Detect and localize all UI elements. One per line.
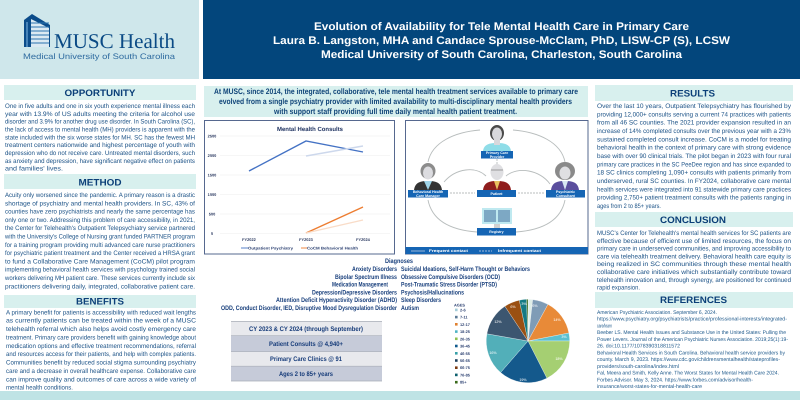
label: behavioral health care manager: Behavioral Health (413, 190, 443, 194)
y axis labels: 500 (209, 212, 215, 216)
diagnoses right column: Post-Traumatic Stress Disorder (PTSD) (401, 282, 497, 289)
panel: conclusion (595, 212, 793, 292)
contact key bar (406, 247, 588, 254)
conclusion text: care via telehealth treatment delivery. Behavioral health care equity is (597, 253, 791, 260)
results text: Over the last 10 years, Outpatient Telepsychiatry has flourished by (597, 103, 792, 110)
method text: for a training program providing multi advanced care nurse practitioners (5, 242, 195, 249)
pie legend: ages: 36-45 (460, 344, 471, 348)
summary table: CY 2023 & CY 2024 (through September) (249, 326, 363, 333)
pie percentage labels (489, 302, 567, 382)
diagnoses right column (401, 266, 530, 312)
conclusion text: primary care in underserved communities, and improving accessibility to (597, 246, 791, 253)
summary table: Patient Consults @ 4,940+ (269, 341, 343, 348)
results text: providing 12,000+ consults serving a current 74 practices with patients (597, 111, 791, 118)
intro callout (204, 86, 588, 117)
label: behavioral health care manager (408, 190, 448, 198)
pie legend: ages: 7-11 (460, 315, 468, 320)
pie legend: ages: 18-25 (460, 329, 471, 334)
y axis labels: 2500 (208, 134, 216, 138)
benefits text: mental health conditions. (6, 385, 73, 392)
method text: the Center for Telehealth's Outpatient Telepsychiatry service partnered (5, 225, 195, 232)
summary table: Primary Care Clinics @ 91 (270, 356, 342, 363)
results text: sustained completed consult increase. CoCM is a model for treating (597, 136, 791, 143)
conclusion text: MUSC's Center for Telehealth's mental health services for SC patients are (597, 230, 791, 237)
method text: to fund a Collaborative Care Management (CoCM) pilot program (5, 258, 195, 265)
pie percentage labels: 6% (532, 304, 538, 308)
chart legend (241, 246, 359, 250)
label: patient (477, 190, 516, 197)
conclusion text: telehealth innovation and, through synergy, are positioned for continued (597, 277, 791, 284)
label: registry (477, 228, 516, 236)
opportunity text: One in five adults and one in six youth experience mental illness each (5, 103, 195, 110)
opportunity text: and families' lives. (5, 166, 63, 173)
references list: care/learn (597, 324, 612, 330)
conclusion text (597, 230, 791, 292)
pie legend: ages (454, 302, 471, 385)
panel: opportunity (4, 85, 196, 173)
diagnoses left column: Depression/Depressive Disorders (312, 289, 397, 296)
opportunity text: depression who do not receive care. Untreated mental disorders, such (5, 150, 195, 157)
references list: Beeber LS. Mental Health Issues and Substance Use in the United States: Pulling the (597, 330, 786, 336)
opportunity text: year with 13.9% of US adults meeting the criteria for alcohol use (5, 111, 195, 118)
icon: MUSC hospital building (24, 14, 50, 47)
label: primary care provider (481, 151, 513, 159)
arrows between care team (428, 130, 565, 232)
diagnoses left column: ODD, Conduct Disorder, IED, Disruptive Mood Dysregulation Disorder (221, 305, 397, 312)
chart legend: Outpatient Psychiatry (248, 246, 294, 250)
line chart: mental health consults (204, 120, 394, 254)
heading: method: METHOD (78, 176, 122, 188)
references list: county. March 9, 2023. https://www.cdc.gov/childrensmentalhealth/stateprofiles- (597, 357, 780, 363)
diagnoses left column (221, 266, 397, 312)
pie legend: ages: 2-6 (460, 307, 466, 312)
logo wordmark: MUSC Health (54, 29, 176, 53)
pie percentage labels: 16% (489, 351, 497, 355)
references list: Power Levers. Journal of the American Psychiatric Nurses Association. 2019;25(1):19- (597, 337, 788, 343)
series: CoCM behavioral health (306, 207, 363, 233)
pie legend: ages: 85+ (460, 380, 467, 385)
diagnoses heading: Diagnoses (385, 258, 413, 265)
heading: references: REFERENCES (660, 294, 727, 305)
label: psychiatric consultant (546, 190, 585, 198)
pie percentage labels: 12% (494, 320, 502, 324)
opportunity text: the lack of access to mental health (MH) providers is apparent with the (5, 126, 195, 134)
heading: conclusion: CONCLUSION (660, 214, 726, 225)
benefits text: medication options and effective treatment recommendations, referral (6, 343, 196, 350)
heading: opportunity: OPPORTUNITY (64, 87, 136, 98)
method text: implementing behavioral health services with psychology trained social (5, 267, 195, 274)
icon: primary care provider (483, 125, 511, 151)
intro callout: At MUSC, since 2014, the integrated, collaborative, tele mental health treatment services available to primary care (214, 87, 578, 96)
label: behavioral health care manager: Care Manager (416, 194, 440, 198)
benefits text: telehealth referral which also helps avoid costly emergency care (6, 326, 196, 333)
pie legend: ages: 66-75 (460, 365, 471, 370)
collaborative care diagram (406, 120, 588, 254)
diagnoses right column: Autism (401, 305, 419, 312)
method text: practitioners delivering daily, integrated, collaborative patient care. (5, 283, 195, 290)
contact key bar: Infrequent contact (498, 248, 542, 253)
poster title: Evolution of Availability for Tele Mental Health Care in Primary Care (314, 21, 689, 33)
label: registry: Registry (489, 230, 504, 234)
references list: Behavioral Health Services in South Carolina. Behavioral health service providers by (597, 350, 785, 356)
chart legend: CoCM Behavioral Health (307, 246, 359, 250)
panel: benefits (4, 295, 197, 392)
benefits text (6, 309, 197, 392)
opportunity text (5, 103, 195, 173)
y axis labels: 1500 (208, 172, 216, 178)
method text (4, 192, 196, 290)
benefits text: A primary benefit for patients is accessibility with reduced wait lengths (6, 309, 196, 316)
pie legend: ages: 56-65 (460, 358, 471, 363)
diagnoses right column: Sleep Disorders (401, 297, 441, 304)
diagnoses right column: Obsessive Compulsive Disorders (OCD) (401, 274, 500, 281)
conclusion text: effective because of efficient use of limited resources, the focus on (597, 238, 791, 245)
pie percentage labels: 3% (561, 335, 567, 339)
label: psychiatric consultant: Psychiatric (556, 190, 575, 194)
diagnoses right column: Suicidal Ideations, Self-Harm Thought or Behaviors (401, 266, 530, 273)
y axis labels: 0 (211, 231, 213, 236)
results text: behavioral health in the context of primary care with strong evidence (597, 145, 791, 152)
benefits text: care and a decrease in overall healthcare expense. Collaborative care (6, 368, 196, 375)
diagnoses left column: Bipolar Spectrum Illness (335, 274, 397, 281)
title banner (203, 0, 800, 79)
diagnoses left column: Attention Deficit Hyperactivity Disorder (ADHD) (276, 297, 397, 304)
panel: method (4, 174, 196, 290)
pie legend: ages: 76-85 (460, 372, 471, 377)
results text: health services were integrated into 91 statewide primary care practices (597, 186, 791, 193)
pie percentage labels: 6% (510, 305, 516, 309)
method text: workers delivering MH patient care. These services currently include six (4, 275, 196, 282)
results text (597, 103, 792, 210)
intro callout: with support staff providing full time daily mental health patient treatment. (273, 107, 517, 116)
series: CoCM behavioral health faded (306, 220, 363, 233)
x axis labels: FY2022 (242, 237, 257, 242)
y axis labels: 2000 (208, 153, 216, 158)
pie chart: ages (486, 299, 570, 383)
benefits text: and resources access for their patients, and help with complex patients. (6, 351, 196, 358)
opportunity text: state included with the six worse states for MH. SC has the fewest MH (5, 134, 195, 141)
label: primary care provider: Provider (490, 155, 505, 159)
x axis labels: FY2024 (356, 237, 371, 242)
contact key bar: Frequent contact (429, 248, 469, 253)
references list: Forbes Advisor. May 3, 2024. https://www.forbes.com/advisor/health- (597, 377, 753, 383)
benefits text: can improve quality and outcomes of care across a wide variety of (6, 376, 196, 383)
results text: ages from 2 to 85+ years. (597, 203, 661, 210)
references list: providers/south-carolina/index.html (597, 364, 679, 370)
y axis labels: 1000 (208, 192, 216, 197)
pie legend: ages: 12-17 (460, 322, 470, 327)
method text: for psychiatric patient treatment and the Center received a HRSA grant (5, 250, 195, 257)
label: primary care provider: Primary Care (486, 151, 508, 155)
pie percentage labels: 3% (521, 302, 527, 306)
results text: 18 SC clinics completing 1,090+ consults with patients primarily from (597, 170, 791, 177)
results text: from all 46 SC counties. The 2021 provider expansion resulted in an (597, 120, 791, 127)
pie legend: ages: AGES (454, 302, 465, 308)
method text: shortage of psychiatry and mental health providers. In SC, 43% of (5, 200, 195, 207)
opportunity text: treatment centers nationwide and highest percentage of youth with (5, 142, 195, 149)
results text: underserved, rural SC counties. In FY2024, collaborative care mental (597, 178, 791, 185)
method text: with the University's College of Nursing grant funded PARTNER program (4, 234, 195, 240)
icon: psychiatric consultant (551, 162, 579, 190)
intro callout: evolved from a single psychiatry provider with limited availability to multi-disciplinary mental health providers (219, 97, 572, 106)
pie percentage labels: 14% (553, 318, 561, 322)
pie legend: ages: 26-35 (460, 336, 471, 341)
chart title: Mental Health Consults (277, 126, 344, 133)
references list: American Psychiatric Association. September 6, 2024. (597, 310, 717, 316)
label: patient: Patient (491, 192, 503, 196)
summary table: Ages 2 to 85+ years (279, 371, 333, 378)
diagnoses right column: Psychosis/Hallucinations (401, 289, 464, 296)
panel: references (595, 292, 793, 390)
results text: base with over 90 clinical trials. The pilot began in 2023 with four rural (597, 153, 791, 160)
affiliation: Medical University of South Carolina, Charleston, South Carolina (321, 49, 683, 61)
conclusion text: being realized in SC communities through these mental health (597, 261, 791, 268)
logo subtitle: Medical University of South Carolina (23, 52, 176, 61)
series: outpatient psychiatry faded (306, 146, 363, 156)
method text: only one or two. Addressing this problem of care accessibility, in 2021, (5, 217, 195, 224)
diagnoses list (221, 258, 530, 312)
results text: increase of 14% completed consults over the previous year with a 23% (597, 128, 791, 135)
opportunity text: disorder and 3.9% for another drug use disorder. In South Carolina (SC), (5, 119, 195, 126)
results text: providing 2,750+ patient treatment consults with the patients ranging in (597, 195, 791, 202)
heading: results: RESULTS (670, 88, 715, 98)
benefits text: treatment. Primary care providers benefit with gaining knowledge about (6, 334, 196, 341)
references list (597, 310, 788, 390)
diagnoses left column: Medication Management (332, 282, 389, 289)
footer band (0, 391, 800, 400)
x axis labels (242, 237, 371, 242)
icon: behavioral health care manager (414, 163, 442, 190)
authors: Laura B. Langston, MHA and Candace Sprouse-McClam, PhD, LISW-CP (S), LCSW (273, 35, 731, 47)
benefits text: as currently patients can be treated within the week of a MUSC (6, 318, 196, 325)
references list: 26. doi:10.1177/1078390318811572 (597, 344, 680, 350)
summary table (231, 321, 382, 381)
opportunity text: as anxiety and depression, have significant negative effect on patients (5, 158, 195, 165)
panel: results (595, 85, 793, 210)
diagnoses left column: Anxiety Disorders (352, 266, 397, 273)
y axis labels (208, 134, 216, 236)
label: psychiatric consultant: Consultant (556, 194, 576, 198)
heading: benefits: BENEFITS (76, 296, 124, 306)
method text: Acuity only worsened since the pandemic. A primary reason is a drastic (5, 192, 196, 199)
references list: Fal, Meera and Smith, Kelly Anne. The Worst States for Mental Health Care 2024. (597, 371, 779, 377)
x axis labels: FY2023 (299, 237, 314, 242)
pie legend: ages: 46-55 (460, 351, 471, 356)
series: outpatient psychiatry (249, 141, 363, 171)
conclusion text: collaborative care initiatives which substantially contribute toward (597, 269, 791, 276)
pie percentage labels: 19% (519, 378, 527, 382)
benefits text: Communities benefit by reduced social stigma surrounding psychiatry (6, 360, 197, 367)
method text: counties have zero psychiatrists and nearly the same percentage has (5, 209, 195, 216)
icon: registry monitor (482, 208, 512, 228)
pie percentage labels: 18% (555, 357, 563, 361)
conclusion text: rapid expansion. (597, 284, 640, 292)
references list: https://www.psychiatry.org/psychiatrists/practice/professional-interests/integrated- (597, 317, 787, 323)
references list: insurance/worst-states-for-mental-health-care (597, 384, 702, 390)
icon: patient (483, 164, 511, 190)
logo panel (0, 0, 199, 79)
